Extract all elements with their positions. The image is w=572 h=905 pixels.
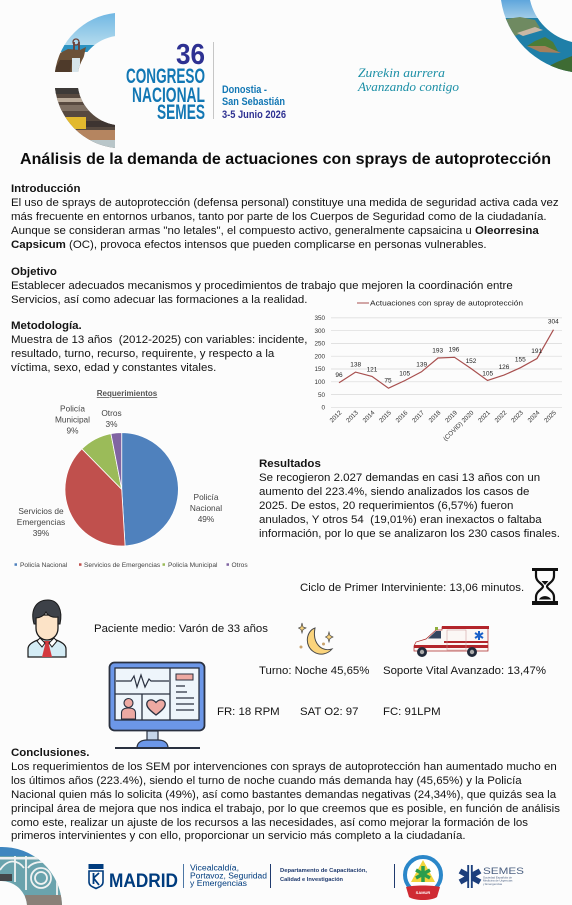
logo: venue and dates: 3-5 Junio 2026 xyxy=(222,109,286,121)
data labels: 105 xyxy=(399,370,411,377)
x axis labels: 2024 xyxy=(527,409,542,424)
logo: venue and dates: San Sebastián xyxy=(222,96,285,108)
text block: objetivo: Establecer adecuados mecanismos y procedimientos de trabajo que mejoren la coordinación entre xyxy=(11,280,513,292)
stat: saturación de oxígeno: SAT O2: 97 xyxy=(300,706,358,718)
divider and department text: Calidad e Investigación xyxy=(280,877,343,883)
x axis labels: 2015 xyxy=(378,409,393,424)
data labels: 139 xyxy=(416,361,428,368)
slogan xyxy=(357,65,460,94)
data labels xyxy=(335,319,559,384)
text block: resultados: aumento del 223.4%, siendo analizados los casos de xyxy=(259,486,529,498)
text block: metodología: resultado, turno, recurso, requirente, y respecto a la xyxy=(11,348,274,360)
pie labels: 9% xyxy=(66,426,79,436)
y axis labels: 300 xyxy=(314,328,325,335)
text block: metodología: víctima, sexo, edad y constantes vitales. xyxy=(11,362,216,374)
pie legend: Otros xyxy=(232,562,248,569)
data labels: 105 xyxy=(482,370,494,377)
pie labels: 49% xyxy=(198,514,215,524)
pie legend: Servicios de Emergencias xyxy=(84,562,161,569)
logo: 36 Congreso Nacional SEMES: SEMES xyxy=(157,101,205,124)
logo: Madrid: y Emergencias xyxy=(190,879,247,888)
x axis labels: 2013 xyxy=(345,409,360,424)
stat: soporte vital avanzado: Soporte Vital Avanzado: 13,47% xyxy=(383,665,546,677)
logo: SAMUR badge xyxy=(394,855,443,900)
header decorative photo arcs and congress logo xyxy=(55,0,572,148)
x axis labels: 2021 xyxy=(477,409,492,424)
logo: Madrid: Vicealcaldía, xyxy=(190,864,239,872)
y axis labels: 100 xyxy=(314,379,325,386)
data labels: 121 xyxy=(367,366,378,373)
logo: Madrid: Portavoz, Seguridad xyxy=(190,872,267,880)
slogan: Avanzando contigo xyxy=(357,79,460,94)
data labels: 191 xyxy=(531,348,543,355)
x axis labels: 2017 xyxy=(411,409,426,424)
photo arc: bottom left xyxy=(0,847,62,905)
logo: SAMUR badge: SAMUR xyxy=(416,890,430,895)
y axis labels: 350 xyxy=(314,315,325,322)
text block: metodología: Muestra de 13 años (2012-2025) con variables: incidente, xyxy=(11,334,307,346)
x axis labels: 2014 xyxy=(362,409,377,424)
x axis labels: 2025 xyxy=(543,409,558,424)
data labels: 75 xyxy=(384,377,392,384)
pie legend: Policía Municipal xyxy=(168,562,218,569)
y axis labels: 250 xyxy=(314,341,325,348)
pie labels: Servicios de xyxy=(18,506,64,516)
text block: resultados xyxy=(259,458,560,540)
pie legend xyxy=(14,562,248,569)
stat: frecuencia cardiaca: FC: 91LPM xyxy=(383,706,441,718)
logo: 36 Congreso Nacional SEMES xyxy=(126,39,205,124)
data labels: 152 xyxy=(466,358,477,365)
data labels: 304 xyxy=(548,319,559,326)
icon: hourglass xyxy=(532,568,558,605)
text block: conclusiones: Conclusiones. xyxy=(11,747,89,759)
logo: 36 Congreso Nacional SEMES: 36 xyxy=(176,39,205,71)
stat: ciclo de primer interviniente: Ciclo de Primer Interviniente: 13,06 minutos. xyxy=(300,582,524,594)
x axis labels: (COVID) 2020 xyxy=(442,409,476,443)
pie labels: Policía xyxy=(60,404,85,414)
divider and department text xyxy=(270,864,368,888)
text block: conclusiones: los últimos años (223.4%), siendo el turno de noche cuando más demanda hay (45,65%) y la Policía xyxy=(11,775,522,787)
pie title: Requerimientos xyxy=(97,389,158,398)
logo: SEMES: SEMES xyxy=(483,866,524,877)
pie labels: Nacional xyxy=(190,503,222,513)
icon: patient xyxy=(27,600,67,658)
text block: resultados: Se recogieron 2.027 demandas en casi 13 años con un xyxy=(259,472,540,484)
pie labels xyxy=(17,404,222,538)
pie legend: Policía Nacional xyxy=(20,562,68,569)
data line xyxy=(339,330,554,388)
data labels: 138 xyxy=(350,361,362,368)
chart legend: Actuaciones con spray de autoprotección xyxy=(370,298,523,308)
text block: conclusiones: como este, realizar un ajuste de los recursos a las necesidades, así como mejorar la formación de los xyxy=(11,817,528,829)
logo: venue and dates xyxy=(222,84,286,121)
logo: SEMES: Medicina de Urgencias xyxy=(483,878,513,882)
logo: Madrid: MADRID xyxy=(109,871,178,892)
icon: moon and stars xyxy=(298,622,334,655)
logo: 36 Congreso Nacional SEMES: CONGRESO xyxy=(126,65,205,88)
text block: objetivo: Objetivo xyxy=(11,266,57,278)
photo arc: bottom left xyxy=(55,88,115,148)
x axis labels: 2023 xyxy=(510,409,525,424)
pie labels: Emergencias xyxy=(17,517,65,527)
text block: introducción: más frecuente en entornos urbanos, tanto por parte de los Cuerpos de Seguridad como de la ciudadanía. xyxy=(11,211,547,223)
text block: introducción: El uso de sprays de autoprotección (defensa personal) constituye una medida de seguridad activa cada vez xyxy=(11,197,559,209)
x axis labels: 2012 xyxy=(329,409,344,424)
text block: metodología: Metodología. xyxy=(11,320,82,332)
text block: conclusiones xyxy=(11,747,560,842)
icon: vital signs monitor xyxy=(108,662,206,749)
text block: introducción xyxy=(11,183,559,251)
text block: resultados: Resultados xyxy=(259,458,321,470)
x axis labels: 2016 xyxy=(395,409,410,424)
divider and department text: Departamento de Capacitación, xyxy=(280,868,368,874)
pie slices xyxy=(65,433,178,546)
pie labels: 3% xyxy=(106,419,118,429)
text block: introducción: Capsicum (OC), provoca efectos intensos que pueden complicarse en personas vulnerables. xyxy=(11,239,487,251)
photo arc: top left xyxy=(55,13,115,72)
x axis labels: 2022 xyxy=(494,409,509,424)
y axis labels: 150 xyxy=(314,366,325,373)
stat: turno: Turno: Noche 45,65% xyxy=(259,665,369,677)
text block: resultados: anulados, Y otros 54 (19,01%) eran inexactos o faltaba xyxy=(259,514,542,526)
pie labels: Municipal xyxy=(55,414,90,424)
stat: paciente medio: Paciente medio: Varón de 33 años xyxy=(94,623,268,635)
data labels: 96 xyxy=(335,372,343,379)
data labels: 126 xyxy=(499,364,510,371)
photo arc: top right xyxy=(501,0,572,72)
y axis labels: 0 xyxy=(321,404,325,412)
text block: conclusiones: primeros intervinientes y con ello, proporcionar un servicio más completo a la ciudadanía. xyxy=(11,830,466,842)
text block: conclusiones: Los requerimientos de los SEM por intervenciones con sprays de autoprotección han aumentado mucho en xyxy=(11,761,557,773)
logo: venue and dates: Donostia - xyxy=(222,84,267,96)
pie labels: 39% xyxy=(33,528,50,538)
data labels: 196 xyxy=(449,346,460,353)
text block: resultados: información, por lo que se analizaron los 230 casos finales. xyxy=(259,528,560,540)
text block: introducción: Aunque se consideran armas "no letales", el compuesto activo, generalmente capsaicina u Oleorresina xyxy=(11,225,539,237)
data labels: 193 xyxy=(432,347,444,354)
text block: introducción: Introducción xyxy=(11,183,80,195)
logo: SEMES: y Emergencias xyxy=(483,882,503,886)
logo: Madrid xyxy=(88,864,267,892)
y axis labels: 50 xyxy=(318,392,325,399)
logo: SEMES: Sociedad Española de xyxy=(483,876,512,880)
x axis labels: 2018 xyxy=(428,409,443,424)
y axis labels xyxy=(314,315,325,412)
pie labels: Policía xyxy=(194,492,219,502)
text block: objetivo xyxy=(11,266,513,306)
slogan: Zurekin aurrera xyxy=(358,65,446,80)
x axis labels xyxy=(329,409,558,443)
logo: SEMES xyxy=(458,865,524,888)
text block: conclusiones: Nacional quien más lo solicita (49%), así como bastantes demandas negativas (24,34%), que quizás sea la xyxy=(11,789,556,801)
x axis labels: 2019 xyxy=(444,409,459,424)
text block: objetivo: Servicios, así como adecuar las formaciones a la realidad. xyxy=(11,294,307,306)
title: Análisis de la demanda de actuaciones con sprays de autoprotección xyxy=(20,151,551,168)
icon: ambulance xyxy=(414,626,489,657)
text block: metodología xyxy=(11,320,307,374)
pie labels: Otros xyxy=(101,408,122,418)
stat: frecuencia respiratoria: FR: 18 RPM xyxy=(217,706,280,718)
data labels: 155 xyxy=(515,356,526,363)
logo: 36 Congreso Nacional SEMES: NACIONAL xyxy=(132,84,205,107)
text block: resultados: 2025. De estos, 20 requerimientos (6,57%) fueron xyxy=(259,500,513,512)
y axis labels: 200 xyxy=(314,354,325,360)
text block: conclusiones: principal área de mejora que nos indica el trabajo, por lo que creemos que es posible, en función de análisis xyxy=(11,803,560,815)
